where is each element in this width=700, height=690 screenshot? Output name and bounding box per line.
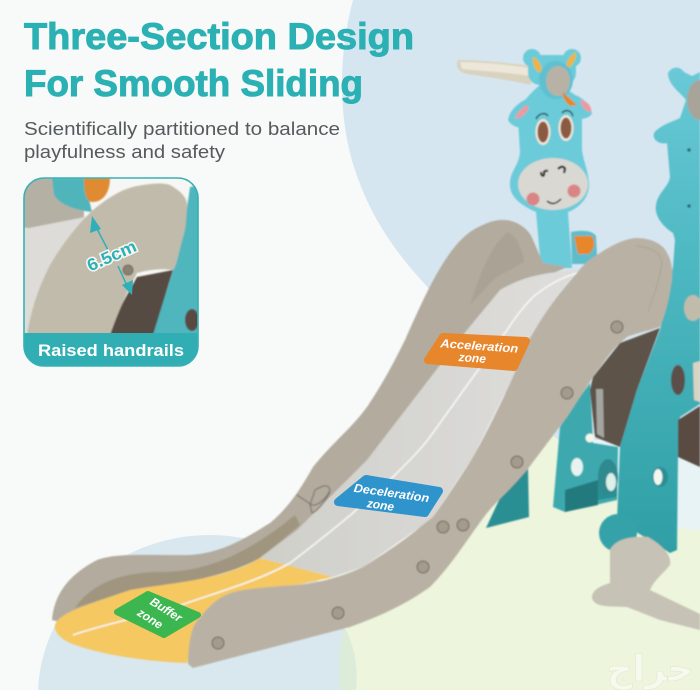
title	[24, 16, 414, 104]
slide bed	[260, 269, 578, 577]
center white line	[73, 273, 577, 635]
left rail	[52, 220, 567, 622]
subtitle: Scientifically partitioned to balance	[24, 118, 340, 139]
dimension arrow	[90, 216, 133, 295]
label: buffer zone: zone	[134, 605, 166, 632]
rear teal supports	[486, 383, 618, 528]
label: buffer zone	[117, 594, 198, 635]
label: deceleration zone	[338, 479, 439, 514]
watermark: حراج	[607, 649, 693, 690]
label: buffer zone: Buffer	[148, 594, 186, 626]
label: deceleration zone: Deceleration	[353, 481, 430, 505]
label: acceleration zone: Acceleration	[439, 336, 519, 356]
rail joint	[297, 486, 330, 513]
label: deceleration zone: zone	[365, 496, 395, 514]
basketball hoop	[457, 60, 532, 85]
title: For Smooth Sliding	[24, 63, 363, 104]
giraffe head tower	[508, 49, 597, 268]
subtitle: playfulness and safety	[24, 141, 226, 162]
label: acceleration zone: zone	[457, 350, 487, 366]
label: acceleration zone	[428, 336, 526, 367]
title: Three-Section Design	[24, 16, 414, 57]
yellow buffer zone	[55, 558, 333, 663]
dimension label: 6.5cm	[84, 237, 139, 275]
subtitle	[24, 118, 340, 162]
rail screws	[212, 321, 623, 649]
inset caption: Raised handrails	[38, 341, 184, 360]
dark underside	[590, 328, 660, 447]
beige foot	[592, 537, 700, 630]
panel: raised handrails inset	[24, 178, 200, 367]
right rail	[188, 238, 672, 668]
right teal tower and giraffe	[617, 68, 700, 553]
teal foot joint	[599, 514, 637, 552]
